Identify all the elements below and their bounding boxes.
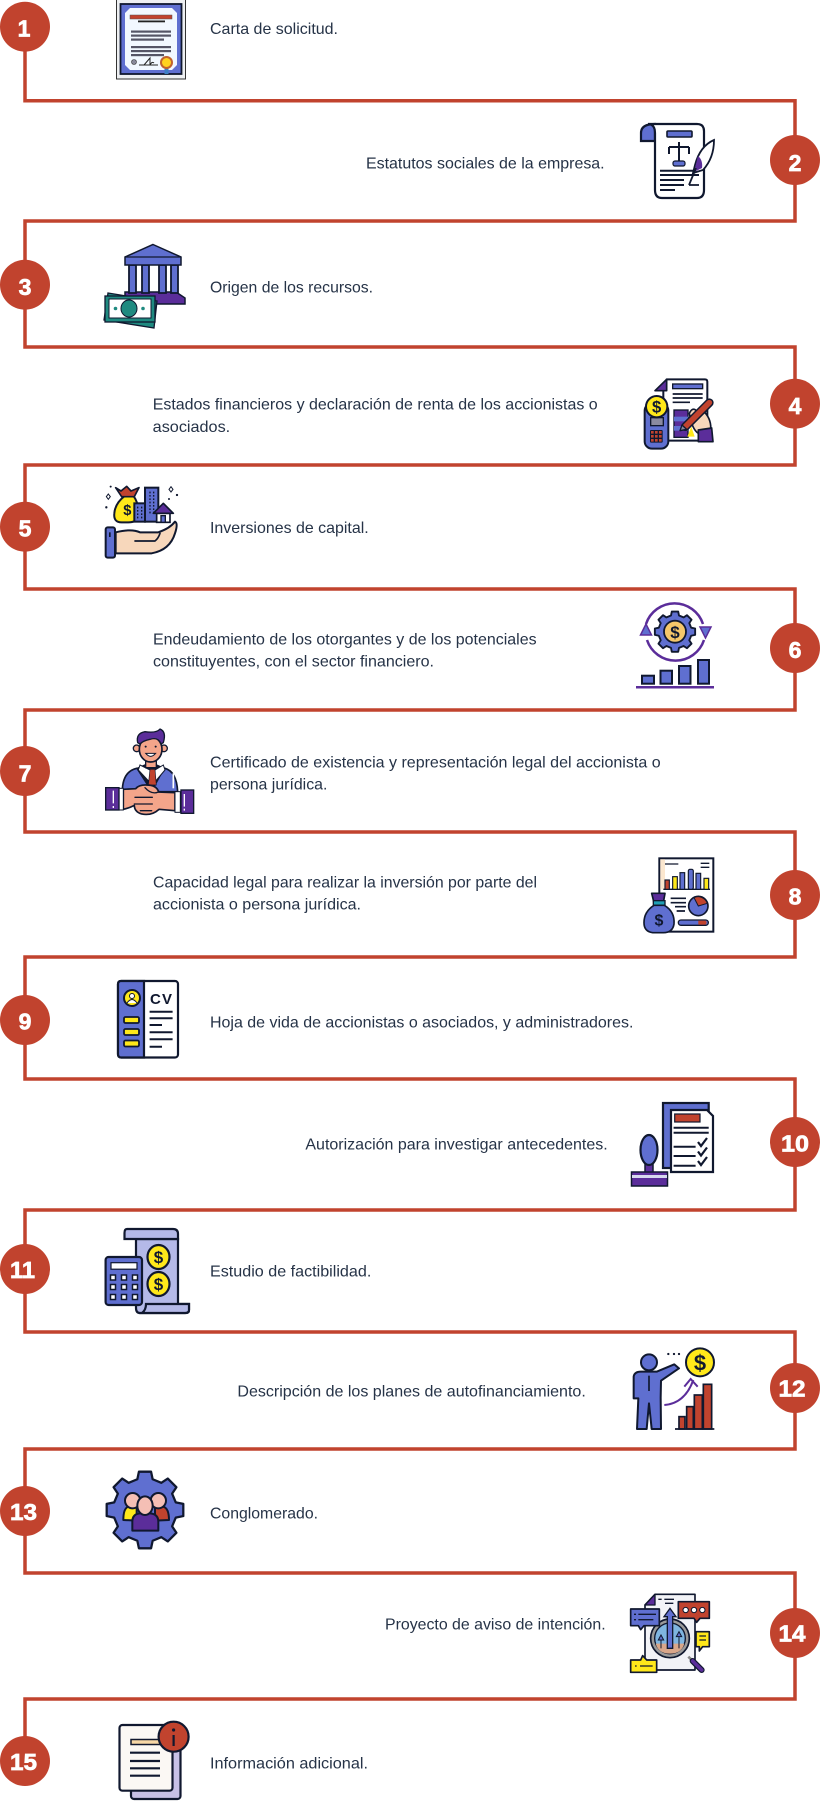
text 3: Origen de los recursos.	[210, 280, 373, 296]
text 8: accionista o persona jurídica.	[153, 897, 361, 914]
text 2: Estatutos sociales de la empresa.	[366, 156, 605, 172]
badge 9: 9	[19, 1008, 31, 1034]
text 6: Endeudamiento de los otorgantes y de los potenciales	[153, 631, 537, 648]
badge 1	[0, 2, 50, 52]
icon: report with charts and money bag	[644, 858, 713, 933]
badge 4: 4	[789, 393, 802, 419]
text 4: asociados.	[153, 419, 230, 436]
step 1	[0, 0, 338, 79]
icon: document with information badge	[120, 1722, 189, 1799]
text 9: Hoja de vida de accionistas o asociados, y administradores.	[210, 1014, 633, 1031]
badge 15	[0, 1736, 50, 1786]
icon: report with charts and money bag: $	[655, 912, 664, 929]
step 5	[0, 486, 369, 558]
badge 1: 1	[18, 16, 31, 42]
badge 15: 15	[10, 1749, 37, 1775]
badge 14: 14	[778, 1621, 806, 1647]
icon: document, magnifier and speech bubbles	[631, 1594, 709, 1672]
step 8	[153, 858, 820, 933]
icon: calculator and bill with coins: $	[154, 1275, 164, 1294]
text 4	[153, 396, 598, 436]
badge 9	[0, 995, 50, 1045]
icon: certificate	[116, 0, 186, 79]
step 13	[0, 1472, 318, 1548]
text 14: Proyecto de aviso de intención.	[385, 1616, 606, 1633]
icon: curriculum vitae	[118, 981, 178, 1058]
step 10	[305, 1103, 820, 1186]
step 2	[366, 124, 820, 198]
icon: curriculum vitae: CV	[150, 991, 172, 1008]
badge 4	[770, 379, 820, 429]
badge 5: 5	[19, 516, 32, 542]
badge 12: 12	[778, 1376, 806, 1402]
badge 8: 8	[789, 884, 802, 910]
text 11: Estudio de factibilidad.	[210, 1263, 371, 1280]
badge 11: 11	[10, 1257, 35, 1283]
icon: financial statement with coin terminal	[645, 379, 713, 449]
icon: financial statement with coin terminal: $	[652, 398, 662, 417]
icon: hand holding money bag and buildings	[105, 486, 178, 558]
icon: scroll with scale and quill	[641, 124, 714, 198]
icon: stamp and checklist document	[632, 1103, 713, 1186]
badge 6	[770, 623, 820, 673]
icon: presenter with rising bars and coin	[634, 1348, 714, 1429]
text 6	[153, 631, 537, 671]
step 9	[0, 981, 633, 1058]
badge 14	[770, 1608, 820, 1658]
badge 7: 7	[19, 760, 31, 786]
step 15	[0, 1722, 368, 1799]
step 7	[0, 729, 661, 814]
icon: calculator and bill with coins: $	[154, 1248, 164, 1267]
icon: calculator and bill with coins	[106, 1229, 189, 1313]
text 10: Autorización para investigar antecedentes.	[305, 1136, 608, 1153]
text 7: Certificado de existencia y representación legal del accionista o	[210, 754, 661, 771]
step 12	[237, 1348, 820, 1429]
text 15: Información adicional.	[210, 1755, 368, 1772]
step 14	[385, 1594, 820, 1672]
badge 6: 6	[789, 637, 801, 663]
step 4	[153, 379, 820, 449]
text 8: Capacidad legal para realizar la inversión por parte del	[153, 875, 537, 892]
badge 8	[770, 870, 820, 920]
icon: businessman clasping hands	[106, 729, 194, 814]
badge 11	[0, 1244, 50, 1294]
icon: hand holding money bag and buildings: $	[123, 503, 131, 519]
icon: gear with coin and rising bars: $	[670, 623, 680, 642]
step 11	[0, 1229, 371, 1313]
step 3	[0, 244, 373, 328]
step 6	[153, 603, 820, 688]
badge 3	[0, 260, 50, 310]
text 1: Carta de solicitud.	[210, 21, 338, 38]
badge 13: 13	[10, 1499, 37, 1525]
text 7	[210, 754, 661, 794]
badge 2	[770, 135, 820, 185]
badge 7	[0, 746, 50, 796]
badge 10: 10	[781, 1131, 809, 1157]
icon: gear with group of people	[107, 1472, 183, 1548]
icon: gear with coin and rising bars	[636, 603, 714, 688]
badge 3: 3	[19, 274, 31, 300]
text 7: persona jurídica.	[210, 777, 327, 794]
badge 10	[770, 1117, 820, 1167]
text 6: constituyentes, con el sector financiero.	[153, 654, 434, 671]
icon: presenter with rising bars and coin: $	[694, 1350, 706, 1375]
icon: bank and banknotes	[104, 244, 185, 328]
text 13: Conglomerado.	[210, 1505, 318, 1522]
text 12: Descripción de los planes de autofinanciamiento.	[237, 1383, 586, 1400]
badge 13	[0, 1486, 50, 1536]
badge 5	[0, 502, 50, 552]
text 4: Estados financieros y declaración de renta de los accionistas o	[153, 396, 598, 414]
badge 12	[770, 1363, 820, 1413]
badge 2: 2	[789, 150, 801, 176]
text 8	[153, 875, 537, 914]
text 5: Inversiones de capital.	[210, 520, 369, 537]
